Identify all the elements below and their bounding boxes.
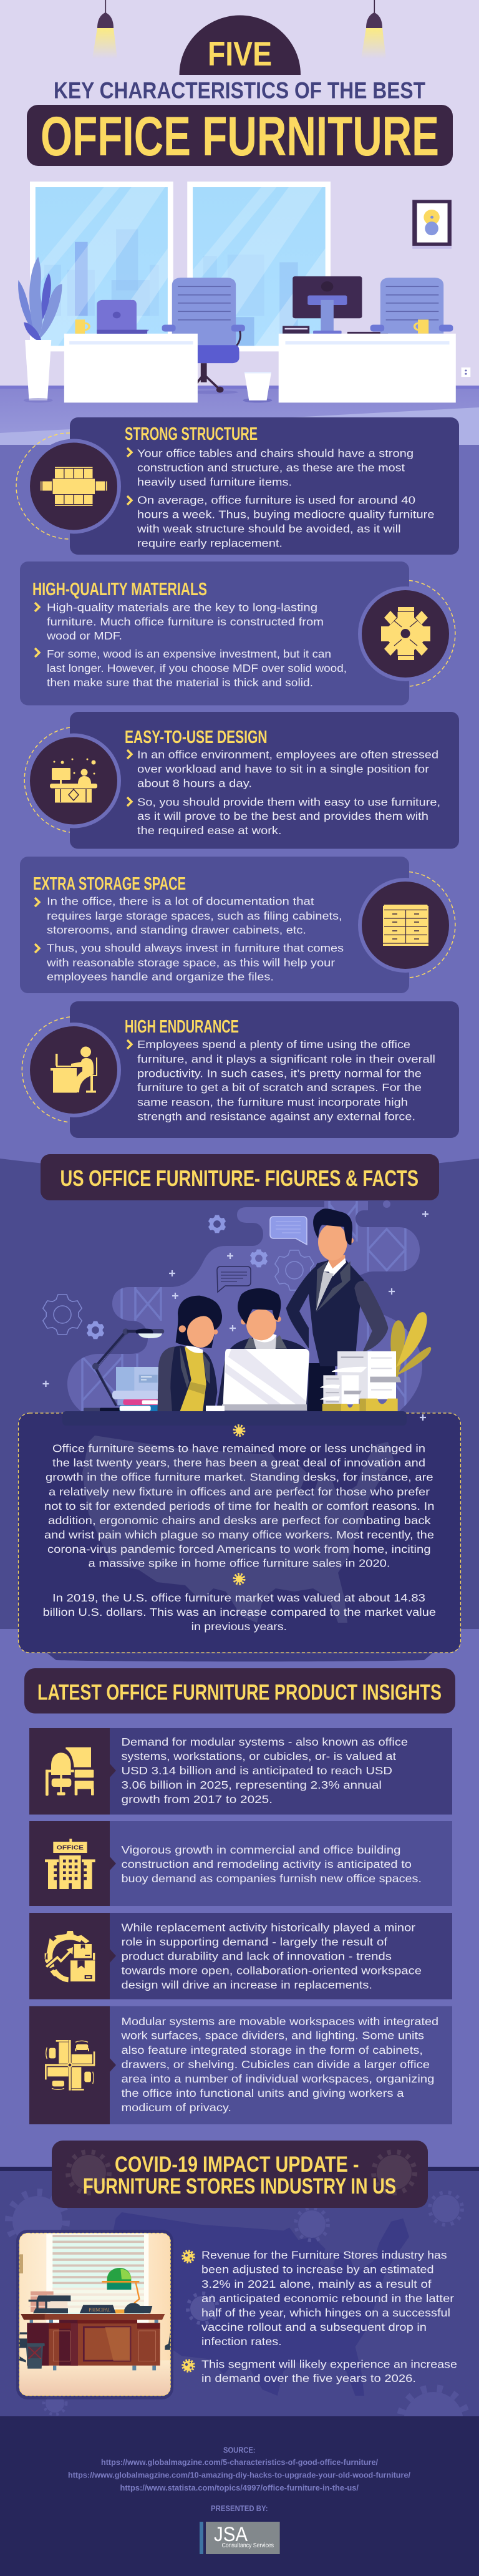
- covid text block 1: half of the year, which hinges on a successful: [201, 2306, 450, 2319]
- desk legs: [30, 2320, 158, 2370]
- body text: On average, office furniture is used for around 40: [137, 494, 415, 507]
- stacked books and box: [112, 1367, 159, 1411]
- body text: In the office, there is a lot of documentation that: [47, 895, 314, 907]
- window blinds: [52, 2235, 144, 2318]
- desk body: [21, 2314, 165, 2366]
- background: covid section: [0, 2171, 479, 2416]
- market value text: in previous years.: [191, 1620, 287, 1633]
- plant yellow leaves: [390, 1312, 431, 1380]
- nameplate: PRINCIPAL: [89, 2307, 111, 2313]
- wall picture: [412, 200, 452, 249]
- text: [121, 1736, 408, 1806]
- text: Modular systems are movable workspaces with integrated: [121, 2015, 438, 2028]
- body text: So, you should provide them with easy to use furniture,: [137, 796, 440, 809]
- book stack: [283, 326, 309, 334]
- body text: same reason, the furniture must incorporate high: [137, 1096, 408, 1108]
- plant: [18, 256, 62, 340]
- covid text block 1: [201, 2249, 454, 2348]
- plus sparkle on panel: [420, 1414, 426, 1421]
- facts text: addition, ergonomic chairs and desks are perfect for combating back: [48, 1514, 431, 1527]
- speech bubble dark: [217, 1266, 251, 1292]
- pot shadow: [24, 398, 53, 402]
- desk right: [279, 334, 456, 402]
- facts text: a relatively new fixture in offices and are perfect for those who prefer: [49, 1485, 430, 1498]
- nameplate: [80, 2305, 116, 2313]
- body text: Thus, you should always invest in furniture that comes: [47, 942, 344, 955]
- facts text: a massive spike in home office furniture sales in 2020.: [89, 1557, 390, 1570]
- covid text block 1: been adjusted to increase by an estimated: [201, 2263, 434, 2276]
- icon: conference table: [30, 443, 117, 530]
- text: work surfaces, space dividers, and lighting. Some units: [120, 2029, 424, 2042]
- virus watermarks: [68, 2152, 415, 2193]
- facts text: corona-virus pandemic forced Americans to work from home, inciting: [47, 1543, 431, 1555]
- body text: about 8 hours a day.: [137, 777, 252, 789]
- body text: High-quality materials are the key to long-lasting: [47, 601, 317, 614]
- body text: furniture to get a bit of scratch and scrapes. For the: [137, 1081, 422, 1094]
- icon circle ring: [26, 734, 121, 829]
- body text: the required ease at work.: [137, 824, 282, 837]
- dashed arc: [16, 433, 70, 539]
- icon: cubicles: [45, 2040, 95, 2091]
- body text: requires large storage spaces, such as filing cabinets,: [47, 910, 342, 922]
- body text: with weak structure should be avoided, as it will: [137, 522, 401, 535]
- monitor: [293, 276, 362, 334]
- panel: easy-to-use design: [24, 712, 459, 848]
- body text: construction and structure, as these are the most: [137, 462, 405, 474]
- virus bullet 2: [183, 2360, 194, 2371]
- icon: office building: OFFICE: [57, 1844, 84, 1850]
- background: floor skirting: [0, 386, 479, 389]
- text: area into a number of individual workspaces, organizing: [121, 2073, 434, 2085]
- team illustration backdrop: [67, 1200, 422, 1411]
- body text: heavily used furniture items.: [137, 476, 292, 488]
- body text: [137, 447, 434, 550]
- window right: [187, 182, 331, 351]
- US map silhouette: [82, 1436, 394, 1623]
- desk lamp: [84, 1328, 164, 1412]
- insight row 4: [29, 2006, 452, 2124]
- heading bar: covid: [52, 2141, 428, 2208]
- speech bubble light: [270, 1217, 307, 1245]
- papers and tray: [29, 2292, 70, 2313]
- window left: [30, 182, 173, 351]
- laptop: [206, 1349, 309, 1411]
- text: Vigorous growth in commercial and office building: [121, 1844, 400, 1856]
- lamp: [102, 2268, 139, 2303]
- ceiling lamp left: [92, 0, 117, 59]
- icon circle ring: [358, 586, 453, 681]
- body text: For some, wood is an expensive investment, but it can: [47, 648, 331, 660]
- title: FIVE: FIVE: [208, 34, 272, 73]
- body text: Your office tables and chairs should have a strong: [137, 447, 414, 460]
- figure: woman: [158, 1296, 222, 1412]
- panel: high endurance: [22, 1001, 459, 1138]
- small wall picture: [19, 2254, 23, 2273]
- virus bullet 1: [183, 2251, 194, 2262]
- background: main purple: [0, 445, 479, 2167]
- insight row 3: [29, 1913, 452, 1999]
- covid text block 1: an anticipated economic rebound in the latter: [201, 2292, 454, 2305]
- bullet chevrons: [127, 448, 132, 505]
- shadow behind office image: [16, 2230, 173, 2399]
- icon: small gear 2: [208, 1215, 226, 1233]
- heading: HIGH ENDURANCE: [125, 1017, 239, 1037]
- heading: EXTRA STORAGE SPACE: [33, 874, 186, 894]
- panel shadow: [47, 1653, 432, 1661]
- bullet chevrons: [127, 1040, 132, 1049]
- title: key characteristics: KEY CHARACTERISTICS OF THE BEST: [54, 77, 425, 104]
- footer sources: https://www.statista.com/topics/4997/office-furniture-in-the-us/: [120, 2483, 359, 2492]
- table top band: [62, 1411, 407, 1426]
- logo: JSA Consultancy Services: [200, 2522, 280, 2554]
- presented by label: PRESENTED BY:: [211, 2504, 268, 2513]
- icon: person at desk: [30, 1026, 117, 1114]
- figure: seated man: [216, 1288, 307, 1411]
- body text: last longer. However, if you choose MDF over solid wood,: [47, 662, 347, 674]
- icon: outline gear right: [275, 1250, 314, 1290]
- insight row 2: [29, 1821, 452, 1906]
- body text: as it will prove to be the best and provides them with: [137, 810, 428, 822]
- bullet chevrons: [35, 898, 39, 953]
- logo: JSA Consultancy Services: Consultancy Services: [222, 2542, 274, 2549]
- footer sources: https://www.globalmagzine.com/5-characteristics-of-good-office-furniture/: [101, 2457, 378, 2467]
- power outlet: [462, 367, 470, 377]
- dashed arc: [409, 580, 455, 686]
- bullet chevrons: [127, 750, 132, 806]
- body text: hours a week. Thus, buying mediocre quality furniture: [137, 508, 434, 520]
- body text: over workload and have to sit in a single position for: [137, 762, 429, 775]
- ceiling lamp right: [361, 0, 386, 59]
- icon circle ring: [26, 1023, 121, 1117]
- icon: outline gear left: [43, 1295, 82, 1334]
- icon: gear with boxes and growth arrow: [45, 1931, 95, 1981]
- body text: furniture. Much office furniture is constructed from: [47, 615, 324, 628]
- facts text: not to sit for extended periods of time for health or comfort reasons. In: [44, 1500, 434, 1512]
- waste bin: [24, 2343, 45, 2369]
- floor: [19, 2360, 170, 2396]
- waste bin: [244, 372, 271, 401]
- covid text block 1: Revenue for the Furniture Stores industry has: [201, 2249, 447, 2262]
- covid section virus decorations: [9, 2192, 467, 2456]
- text: construction and remodeling activity is anticipated to: [121, 1858, 412, 1870]
- desk left: [64, 334, 198, 402]
- icon: small gear 3: [250, 1250, 268, 1267]
- icon circle ring: [26, 439, 121, 534]
- dashed arc: [24, 727, 70, 832]
- icon: cross desk: [362, 590, 449, 678]
- text: towards more open, collaboration-oriented workspace: [121, 1965, 422, 1977]
- footer sources: https://www.globalmagzine.com/10-amazing-diy-hacks-to-upgrade-your-old-wood-furniture/: [68, 2470, 410, 2479]
- text: 3.06 billion in 2025, representing 2.3% annual: [121, 1779, 382, 1791]
- plus sparkles: [42, 1211, 428, 1387]
- insight row 1: [29, 1728, 452, 1814]
- icon: star burst top: [235, 1426, 244, 1435]
- icon: filing cabinet: [362, 882, 449, 969]
- icon: desk with monitor and person: [30, 737, 117, 825]
- heading: STRONG STRUCTURE: [125, 424, 258, 444]
- body text: [46, 601, 347, 689]
- body text: employees handle and organize the files.: [47, 971, 274, 983]
- heading line 2: FURNITURE STORES INDUSTRY IN US: [83, 2174, 396, 2199]
- background: wall: [0, 0, 479, 386]
- facts text: and wrist pain which plague so many office workers. Most recently, the: [44, 1529, 434, 1541]
- panel: US facts: [19, 1411, 460, 1653]
- body text: [137, 1038, 435, 1123]
- text: [121, 1922, 422, 1991]
- heading line 1: COVID-19 IMPACT UPDATE -: [115, 2152, 359, 2177]
- body text: with reasonable storage space, as this will help your: [46, 956, 335, 969]
- background: footer: [0, 2416, 479, 2576]
- body text: furniture, and it plays a significant role in their overall: [137, 1053, 435, 1066]
- body text: [137, 749, 440, 837]
- dashed arc: [22, 1017, 70, 1122]
- panel: strong structure: [16, 417, 459, 555]
- market value text: billion U.S. dollars. This was an increase compared to the market value: [43, 1606, 436, 1618]
- telephone: [123, 2303, 152, 2313]
- heading bar: US office furniture: [41, 1154, 439, 1200]
- bullet chevrons: [35, 603, 39, 657]
- covid section US map: [110, 2212, 409, 2396]
- background: figures section: [0, 1159, 479, 1629]
- market value text: [43, 1592, 436, 1633]
- body text: wood or MDF.: [46, 629, 122, 642]
- heading: HIGH-QUALITY MATERIALS: [32, 580, 207, 600]
- title bar: [27, 105, 453, 166]
- logo: JSA Consultancy Services: JSA: [214, 2523, 248, 2545]
- text: modicum of privacy.: [121, 2101, 231, 2114]
- panel: extra storage space: [20, 857, 455, 993]
- body text: require early replacement.: [137, 537, 283, 550]
- text: [121, 1844, 422, 1885]
- covid text block 1: infection rates.: [201, 2335, 282, 2348]
- covid text block 1: 3.2% in 2021 alone, mainly as a result of: [201, 2278, 432, 2290]
- background: floor light band: [0, 407, 479, 445]
- text: growth from 2017 to 2025.: [121, 1793, 273, 1806]
- title dome: [180, 15, 301, 75]
- body text: productivity. In such cases, it’s pretty normal for the: [137, 1067, 422, 1079]
- keyboard: [347, 332, 388, 334]
- body text: then make sure that the material is thick and solid.: [47, 676, 313, 689]
- facts text: growth in the office furniture market. Standing desks, for instance, are: [46, 1471, 433, 1484]
- chairs at edges: [19, 2331, 170, 2363]
- office chair right: [370, 278, 453, 334]
- text: Demand for modular systems - also known as office: [121, 1736, 408, 1748]
- laptop: [97, 300, 149, 334]
- text: USD 3.14 billion and is anticipated to reach USD: [121, 1764, 392, 1777]
- text: product durability and lack of innovation - trends: [121, 1950, 392, 1962]
- figure: standing man: [286, 1208, 388, 1412]
- text: [120, 2015, 438, 2114]
- panel: high-quality materials: [20, 561, 455, 705]
- background: floor: [0, 386, 479, 445]
- facts text: [44, 1442, 434, 1570]
- body text: strength and resistance against any external force.: [137, 1111, 415, 1123]
- footer re-cover: [0, 2416, 479, 2576]
- text: role in supporting demand - largely the result of: [121, 1935, 387, 1948]
- text: drawers, or shelving. Cubicles can divide a larger office: [121, 2058, 430, 2071]
- plant pot: [25, 340, 51, 401]
- text: buoy demand as companies furnish new office spaces.: [121, 1872, 422, 1885]
- office scene illustration: [18, 182, 470, 402]
- office chair left: [162, 278, 245, 394]
- text: systems, workstations, or cubicles, or- is valued at: [121, 1750, 396, 1762]
- covid text block 1: vaccine rollout and a subsequent drop in: [201, 2321, 427, 2333]
- icon circle ring: [358, 878, 453, 973]
- mug left: [75, 319, 89, 334]
- market value text: In 2019, the U.S. office furniture market was valued at about 14.83: [52, 1592, 425, 1604]
- body text: storerooms, and standing drawer cabinets, etc.: [47, 924, 306, 936]
- dashed arc: [409, 872, 455, 978]
- covid text block 2: [201, 2358, 457, 2384]
- footer sources: SOURCE:: [223, 2446, 256, 2455]
- text: also feature integrated storage in the form of cabinets,: [121, 2044, 423, 2056]
- facts text: the last twenty years, there has been a great deal of innovation and: [52, 1456, 425, 1469]
- text: design will drive an increase in replacements.: [121, 1979, 372, 1991]
- heading bar: latest insights: [24, 1668, 455, 1713]
- body text: In an office environment, employees are often stressed: [137, 749, 438, 761]
- covid text block 2: in demand over the five years to 2026.: [201, 2372, 416, 2384]
- text: the office into functional units and giving workers a: [121, 2087, 404, 2099]
- body text: [46, 895, 344, 983]
- text: While replacement activity historically played a minor: [121, 1922, 415, 1934]
- body text: Employees spend a plenty of time using the office: [137, 1038, 410, 1051]
- footer sources: [68, 2446, 410, 2492]
- heading: EASY-TO-USE DESIGN: [125, 727, 267, 747]
- icon: small gear 1: [87, 1321, 104, 1339]
- icon: chair and desk: [46, 1747, 94, 1796]
- icon: office building: [45, 1839, 95, 1889]
- orange item: [115, 2310, 124, 2313]
- paper stacks and trays: [320, 1351, 401, 1411]
- icon: star burst bottom: [235, 1575, 244, 1583]
- covid text block 2: This segment will likely experience an increase: [201, 2358, 457, 2371]
- office desk picture: [19, 2233, 170, 2396]
- waste bin shadow: [243, 398, 272, 402]
- facts text: Office furniture seems to have remained more or less unchanged in: [52, 1442, 425, 1455]
- mug right: [415, 319, 428, 334]
